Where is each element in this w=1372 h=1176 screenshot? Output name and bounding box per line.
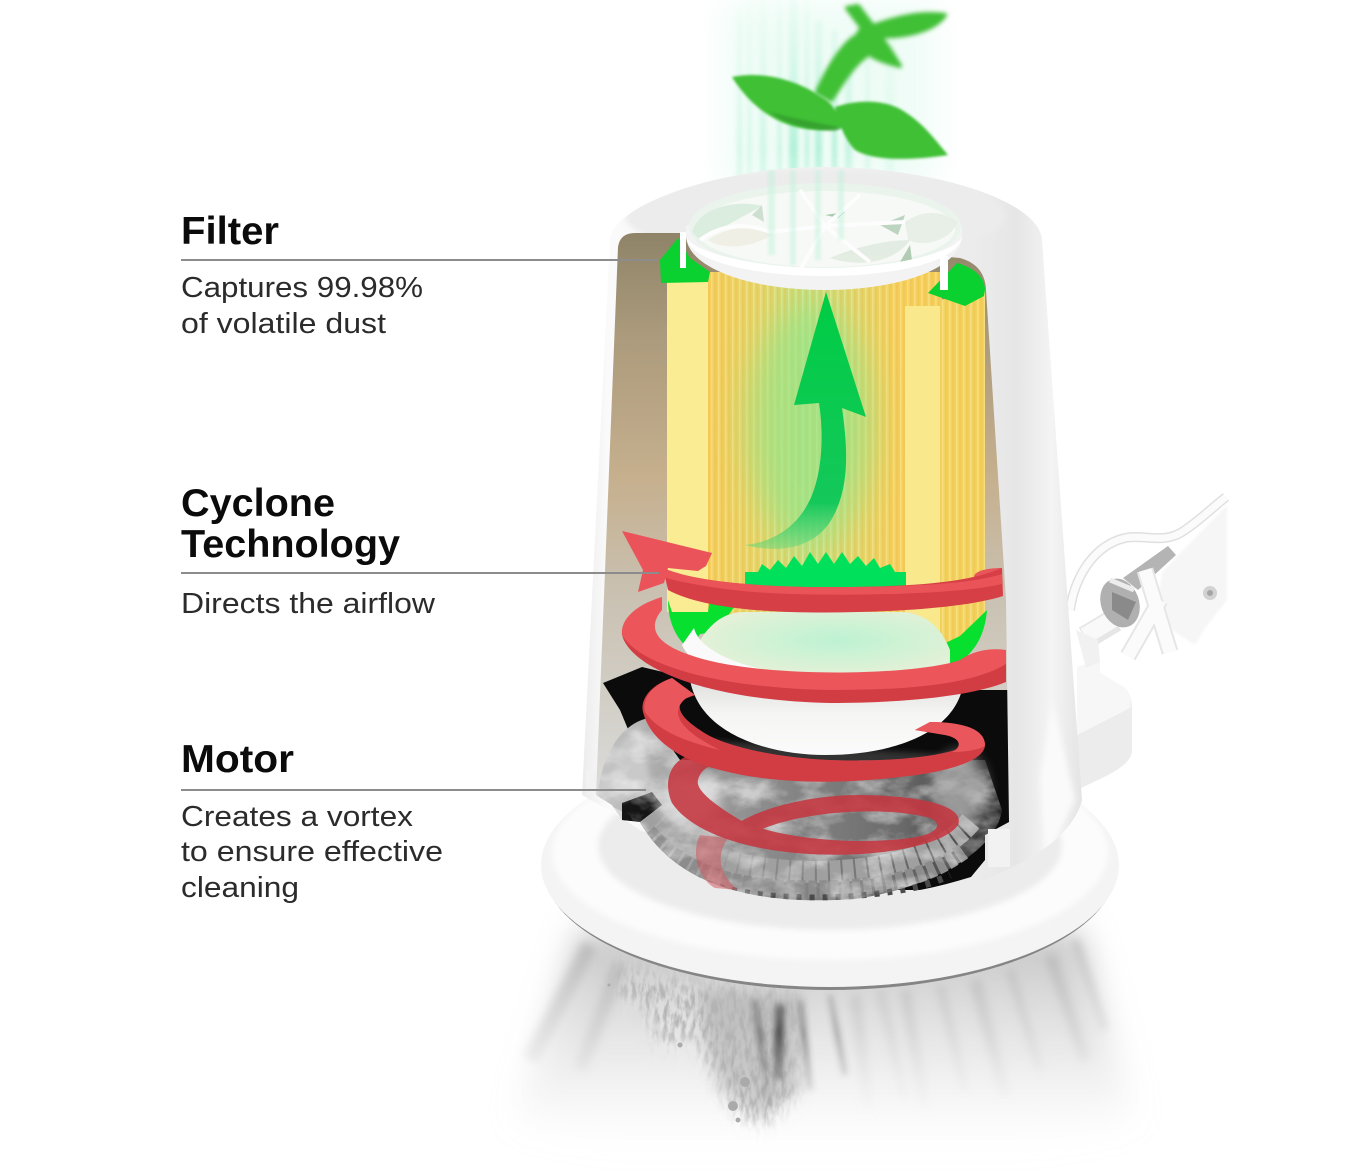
shell ribs at cutaway base: [586, 770, 1010, 867]
clip plate: [1158, 505, 1227, 645]
description: Filter: of volatile dust: [181, 308, 386, 340]
soft grey under the speckles: [700, 990, 800, 1120]
heading: Cyclone Technology: Technology: [181, 523, 400, 566]
cutaway interior: [590, 230, 1020, 902]
description: Cyclone Technology: Directs the airflow: [181, 588, 436, 620]
heading: Motor: Motor: [181, 738, 294, 781]
description: Filter: Captures 99.98%: [181, 272, 423, 304]
metal joint: [1123, 546, 1176, 590]
speckled dust patch: [615, 965, 795, 1125]
red vortex spiral: [622, 531, 1006, 890]
heading: Cyclone Technology: Cyclone: [181, 482, 335, 525]
lower right green clamp: [904, 610, 987, 676]
description: Motor: cleaning: [181, 872, 299, 904]
leader line: Filter: [181, 259, 658, 261]
handle connector and clip: [1070, 497, 1227, 790]
pleated right: [940, 290, 985, 646]
green glow inside filter: [748, 305, 872, 545]
description: Motor: to ensure effective: [181, 836, 443, 868]
coil one with arrowhead: [622, 531, 1003, 612]
white cup: [682, 612, 962, 755]
product: vacuum body shell: [582, 167, 1082, 895]
infographic canvas: [181, 0, 1229, 1134]
housing: [1077, 660, 1132, 790]
upper right green clamp: [928, 263, 985, 306]
left flat face: [667, 282, 708, 612]
connector pipe: [1085, 620, 1115, 638]
lower left green clamp: [668, 598, 735, 650]
motor fan: [598, 718, 1002, 902]
filter cartridge: [660, 238, 987, 676]
top rim and filter opening: [680, 183, 962, 290]
back wall: [590, 230, 1020, 830]
right flat face: [905, 306, 940, 646]
coil three: [642, 678, 985, 782]
leader line: Cyclone Technology: [181, 572, 659, 574]
pleated centre: [706, 272, 942, 622]
description: Motor: Creates a vortex: [181, 801, 414, 833]
power cable: [1070, 497, 1226, 610]
icon: green leaves: [732, 6, 948, 159]
black motor housing: [603, 667, 1012, 890]
serrated green gear: [745, 552, 906, 590]
heading: Filter: Filter: [181, 210, 279, 253]
vane spokes: [700, 190, 905, 270]
clip thumb bars: [1145, 570, 1170, 652]
leader line: Motor: [181, 789, 646, 791]
green airflow arrow: [745, 292, 866, 549]
airflow streaks through the filter opening: [768, 170, 844, 265]
airflow streaks above the top: [725, 0, 935, 280]
coil four, lowest and fading: [668, 757, 959, 890]
dust cloud below the head: [515, 930, 1135, 1150]
filter vanes: [692, 204, 958, 263]
label: Cyclone Technology: [181, 482, 659, 620]
label: Filter: [181, 210, 658, 340]
coil two: [622, 597, 1006, 703]
label: Motor: [181, 738, 646, 904]
product: base disc: [541, 743, 1119, 990]
upper left green clamp: [660, 238, 710, 283]
